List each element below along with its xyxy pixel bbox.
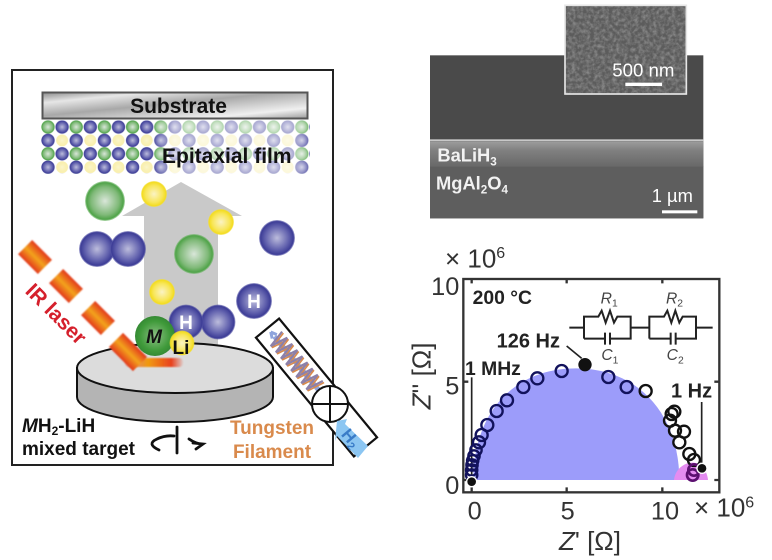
panel: deposition schematic [12,70,377,465]
chart: impedance Nyquist plot [407,243,754,556]
SEM background [430,55,703,218]
circuit labels: 2 [677,299,683,310]
floating atoms [79,181,295,340]
callout: 1 Hz: 1 Hz [671,380,712,402]
y multiplier: 6 [496,245,505,262]
y multiplier: × 10 [445,243,496,273]
label: target name: MH [22,416,52,437]
circuit labels: 1 [612,299,618,310]
arrow: upward vapor flow [122,182,242,345]
callout: 1 Hz [671,380,712,467]
data points: open circles [466,365,633,481]
label: tungsten filament: Tungsten [230,418,314,439]
atom: M: M [146,327,163,348]
x tick labels: 5 [561,497,575,525]
highlighted point: 126 Hz [578,358,592,371]
label: BaLiH3: 3 [490,156,497,169]
callout: 126 Hz [497,330,582,358]
label: temperature: 200 °C [473,288,532,309]
substrate bar [42,92,308,118]
circuit labels: C [667,347,678,364]
highlighted point: 1 Hz [697,463,707,473]
atom: Li: Li [173,338,189,359]
x tick labels: 0 [468,497,482,525]
highlighted point: 1 MHz [467,477,477,487]
label: H2: H [337,425,360,447]
label: target name: 2 [52,424,59,438]
icon: tungsten coil [264,326,326,396]
IR laser pulses [18,240,147,371]
film surface line [430,139,703,141]
callout: 1 MHz [465,359,521,478]
circuit labels [601,290,684,366]
y tick labels: 10 [431,273,459,301]
x multiplier: 6 [745,494,754,511]
icon: valve [312,386,348,422]
icon: rotation arrow [152,427,203,453]
label: MgAl2O4: 4 [502,183,509,196]
substrate bar: Substrate [130,95,227,118]
label: MgAl2O4: 2 [481,183,488,196]
y axis title: Z'' [Ω] [407,343,437,410]
atom: H near target: H [179,313,193,334]
atom: H near target [168,304,204,340]
scale bar 1 um: 1 µm [652,185,693,206]
film cross-section [430,142,703,167]
x tick labels: 10 [651,497,679,525]
label: MgAl2O4: O [487,172,502,193]
inset micrograph: 500 nm [612,59,674,80]
data points: open circles black [640,385,700,466]
label: target name: -LiH [58,416,95,437]
y tick labels: 0 [445,472,459,500]
callout: 126 Hz: 126 Hz [497,330,560,352]
equivalent circuit [569,311,713,345]
label: MgAl2O4: MgAl [436,172,481,193]
laser beam spot on target [125,358,183,367]
source tube [256,319,377,456]
x multiplier: × 10 [694,493,745,523]
label: filament: Filament [233,442,312,463]
substrate layer [430,166,703,218]
atom: H upper right [236,283,272,319]
data points: low frequency cluster [687,464,700,481]
hydrogen source with filament [256,319,377,458]
circuit labels: R [666,290,677,307]
target disk [77,343,273,422]
atom: M [135,316,175,356]
semicircle fit: R2 [674,463,708,480]
y tick labels [431,273,459,500]
label: mixed target: mixed target [22,439,136,460]
circuit labels: 1 [613,355,619,366]
epitaxial film lattice [41,120,310,174]
plot frame and ticks [463,279,719,492]
label: IR laser: IR laser [21,279,91,349]
panel: SEM micrograph [430,5,703,218]
x axis title: Z' [Ω] [558,526,621,556]
circuit labels: R [601,290,612,307]
x tick labels [468,497,679,525]
semicircle fit: R1 [473,368,679,480]
circuit labels: C [601,347,613,364]
label: BaLiH3: BaLiH [437,145,490,166]
label: H2: 2 [344,440,357,453]
panel frame [12,70,333,465]
arrow: hydrogen inflow [335,419,368,458]
scale bar 1 um [652,185,697,213]
callout: 1 MHz: 1 MHz [465,359,521,380]
y tick labels: 5 [445,372,459,400]
circuit labels: 2 [678,355,684,366]
label: epitaxial film: Epitaxial film [162,145,292,168]
inset micrograph [565,5,686,94]
atom: Li [170,330,194,359]
atom: H upper right: H [247,292,261,313]
